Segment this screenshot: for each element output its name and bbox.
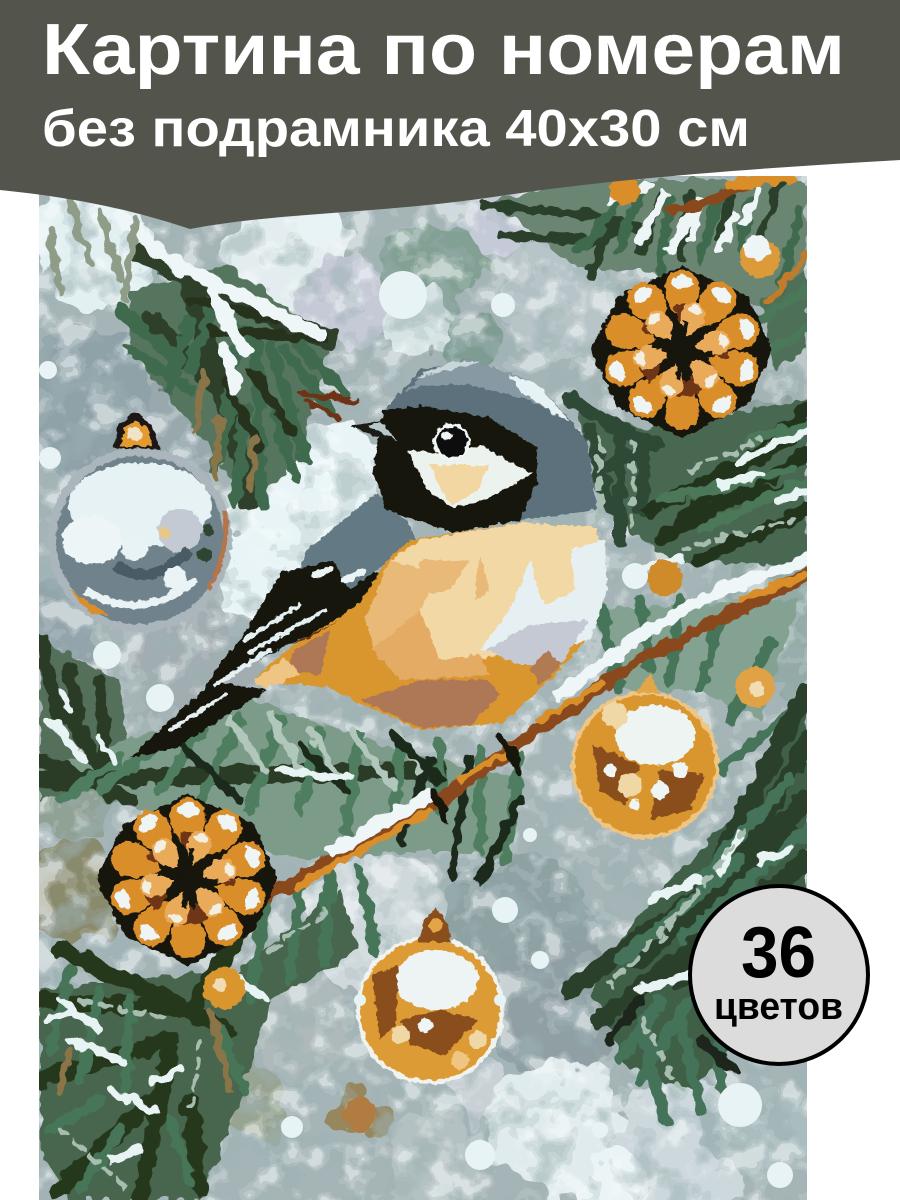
title: Картина по номерам xyxy=(42,10,845,90)
bird eye xyxy=(435,425,469,459)
ornament sphere xyxy=(52,452,228,628)
pine branch: right side with baubles xyxy=(570,600,807,1120)
subtitle: без подрамника 40х30 см xyxy=(42,100,750,158)
ornament cap xyxy=(112,412,160,450)
small gold bauble: bottom left xyxy=(203,967,245,1009)
bird back xyxy=(300,493,417,590)
painting background xyxy=(39,176,807,1200)
bird head xyxy=(387,360,597,520)
silver ornament xyxy=(52,412,228,628)
bird black face xyxy=(373,406,537,533)
small gold bauble: top xyxy=(610,175,780,278)
painting: chickadee on a snowy pine branch xyxy=(15,175,840,1200)
badge: number of colours xyxy=(690,886,868,1064)
header banner xyxy=(0,0,900,229)
badge circle xyxy=(690,886,868,1064)
pine branch: middle, under the bird xyxy=(40,640,520,880)
background colour blotches xyxy=(15,178,840,1200)
badge number: 36 xyxy=(741,913,816,993)
gold bauble: bottom xyxy=(358,908,502,1082)
bird cheek xyxy=(407,445,532,508)
foliage base masses xyxy=(40,180,807,1200)
blurred gold spot xyxy=(341,1097,375,1131)
pine branch: right middle xyxy=(570,290,807,570)
pine branch: bottom left xyxy=(40,870,375,1200)
bird tail and wing xyxy=(130,560,390,758)
wing white stripes xyxy=(170,605,325,730)
pine branch: top right xyxy=(485,178,807,300)
gold bauble: right xyxy=(573,674,717,837)
pine branch with snow: right xyxy=(270,560,807,895)
background painterly mottling xyxy=(39,176,807,1200)
pine branch: top left xyxy=(50,200,356,505)
bird beak xyxy=(350,421,397,440)
pine cone: bottom left xyxy=(96,794,278,966)
pine cone: top right xyxy=(590,266,772,438)
bird belly xyxy=(253,523,607,730)
chickadee xyxy=(130,360,607,758)
small gold baubles: right xyxy=(647,560,775,707)
snowflakes xyxy=(39,203,793,1188)
badge label: цветов xyxy=(714,986,843,1028)
